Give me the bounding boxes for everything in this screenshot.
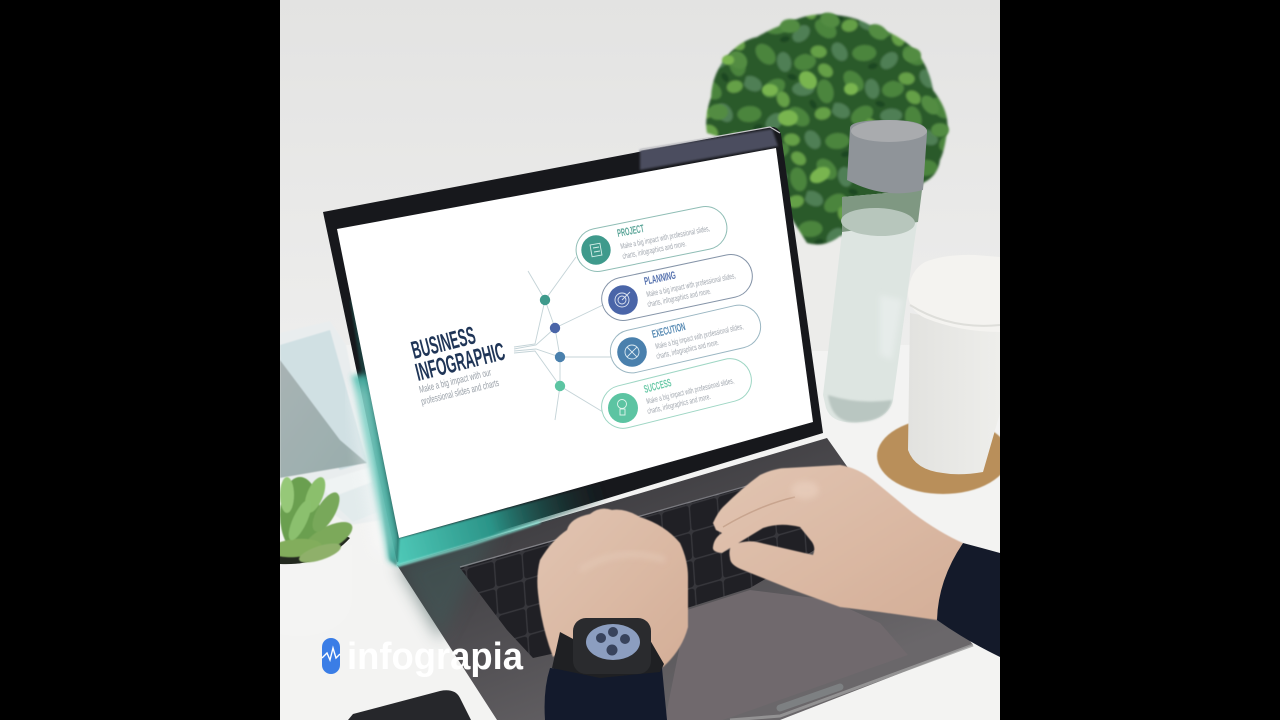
card: planning: Make a big impact with professional slides, bbox=[646, 271, 736, 299]
lid rim highlight bbox=[640, 127, 780, 150]
laptop lid bezel bbox=[323, 127, 823, 562]
smart watch bbox=[552, 618, 664, 678]
phone at bottom bbox=[348, 690, 471, 720]
keyboard area bbox=[460, 470, 818, 658]
card: execution: charts, infographics and more. bbox=[655, 338, 720, 361]
card: success: SUCCESS bbox=[643, 377, 673, 396]
left base teal tint bbox=[397, 530, 500, 640]
left hand bbox=[537, 509, 688, 667]
book stack at left bbox=[280, 321, 382, 525]
card: execution bbox=[610, 304, 762, 374]
card: success: charts, infographics and more. bbox=[646, 392, 712, 416]
card: project bbox=[576, 206, 728, 272]
slide sub-heading: professional slides and charts bbox=[420, 378, 500, 408]
slide network lines bbox=[514, 257, 612, 420]
desk surface bbox=[280, 400, 1000, 720]
trackpad bbox=[665, 590, 908, 720]
water bottle bbox=[823, 120, 927, 422]
slide heading: INFOGRAPHIC bbox=[413, 338, 508, 387]
icon: logo pulse capsule bbox=[322, 638, 340, 674]
laptop base bbox=[397, 438, 973, 720]
slide sub-heading: Make a big impact with our bbox=[418, 367, 493, 396]
card: success bbox=[601, 358, 752, 429]
infograpia logo bbox=[322, 636, 524, 678]
cork coaster bbox=[876, 423, 1000, 495]
icon: light bulb bbox=[618, 400, 626, 415]
icon: strategy ball bbox=[625, 345, 639, 359]
card: planning bbox=[601, 254, 753, 321]
white plant pot behind laptop bbox=[798, 225, 840, 351]
front lip highlight bbox=[730, 645, 973, 720]
card: execution: Make a big impact with professional slides, bbox=[654, 322, 744, 351]
teal light glow around lid bbox=[350, 300, 620, 566]
card: success: Make a big impact with professional slides, bbox=[645, 376, 735, 406]
card: project: PROJECT bbox=[616, 223, 645, 240]
icon: target bbox=[615, 292, 630, 307]
slide sub-heading bbox=[418, 370, 500, 407]
small succulent in pot bbox=[280, 476, 354, 564]
keyboard top silver line bbox=[460, 485, 748, 568]
card: project: Make a big impact with professional slides, bbox=[620, 224, 711, 251]
logo wordmark: infograpia bbox=[347, 636, 524, 678]
laptop screen bbox=[337, 148, 813, 538]
right hand and forearm bbox=[713, 465, 963, 620]
right sleeve bbox=[937, 543, 1000, 657]
card: planning: PLANNING bbox=[643, 270, 677, 288]
coffee cup with lid bbox=[908, 255, 1000, 474]
slide: business infographic bbox=[408, 203, 765, 433]
lid reflection bbox=[640, 129, 778, 170]
plant: round green shrub bbox=[706, 10, 949, 244]
card: planning: charts, infographics and more. bbox=[647, 287, 712, 309]
wall background bbox=[280, 0, 1000, 345]
slide heading bbox=[410, 326, 505, 381]
node dots bbox=[540, 295, 565, 391]
slide heading: BUSINESS bbox=[408, 321, 478, 365]
video frame: laptop scene on black background bbox=[280, 0, 1000, 720]
lip notch bbox=[780, 687, 840, 708]
card: project: charts, infographics and more. bbox=[622, 239, 687, 261]
left sleeve bbox=[545, 668, 667, 720]
card: execution: EXECUTION bbox=[651, 321, 687, 341]
icon: scroll bbox=[590, 243, 602, 257]
